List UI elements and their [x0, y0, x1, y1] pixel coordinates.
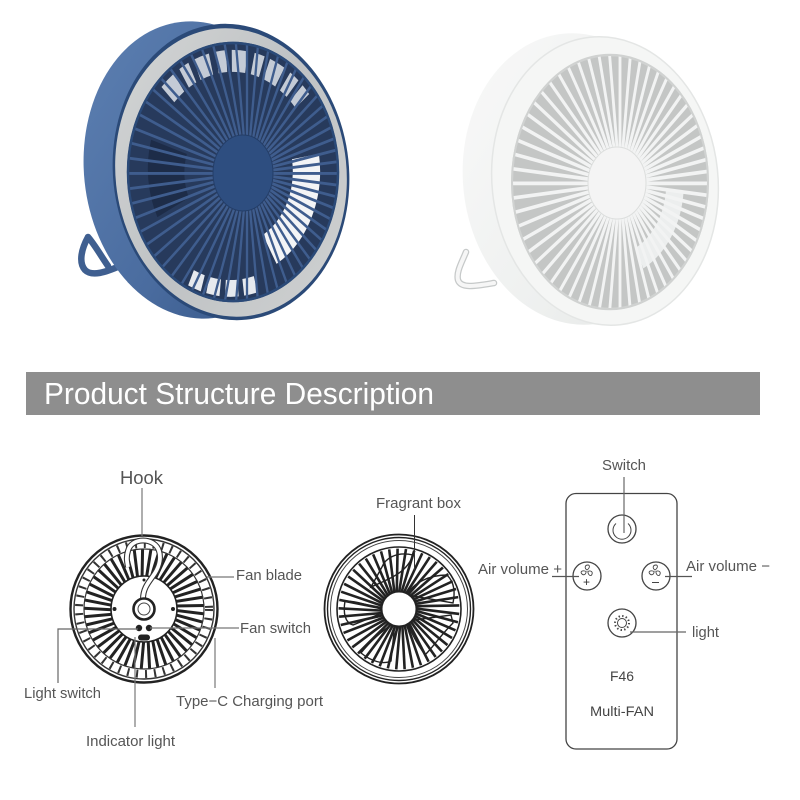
blue fan grille [126, 42, 340, 302]
light switch label [24, 629, 138, 702]
blue fan hub [213, 135, 273, 211]
white fan front rim [478, 25, 732, 337]
white fan product photo [454, 34, 719, 326]
white fan grille [511, 54, 709, 310]
white fan hub [588, 147, 646, 219]
hook label: Hook [120, 467, 164, 488]
icon: fan plus button: + [583, 575, 590, 589]
icon: light button [608, 609, 636, 637]
front grille drawing [315, 534, 474, 695]
banner title: Product Structure Description [44, 376, 434, 411]
remote body [566, 494, 677, 749]
back view diagram [24, 467, 324, 750]
light label: light [692, 624, 720, 641]
icon: blue fan hook [81, 237, 120, 273]
blue fan product photo [78, 21, 350, 320]
blue fan front rim [98, 12, 364, 332]
fan blade label [207, 567, 302, 584]
switch label: Switch [602, 457, 646, 474]
blue fan light ring [101, 17, 361, 328]
icon: fan minus button [642, 562, 670, 590]
light switch label: Light switch [24, 685, 101, 702]
indicator light label: Indicator light [86, 733, 176, 750]
fan blade label: Fan blade [236, 567, 302, 584]
type-c label: Type−C Charging port [176, 693, 324, 710]
front view diagram [315, 495, 474, 695]
blue fan body [69, 10, 325, 330]
air volume plus label: Air volume + [478, 561, 562, 578]
white fan body [448, 22, 708, 336]
light label [630, 624, 720, 641]
icon: power button [608, 477, 636, 543]
fan switch label: Fan switch [240, 620, 311, 637]
icon: white fan hook [458, 252, 494, 286]
indicator light label [86, 637, 176, 750]
product name label: Multi-FAN [590, 704, 654, 719]
section banner [26, 372, 760, 415]
hook label [120, 467, 164, 536]
model label: F46 [610, 668, 634, 684]
fragrant box label: Fragrant box [376, 495, 461, 512]
remote control diagram [478, 457, 770, 749]
fragrant box label [376, 495, 461, 570]
back grille drawing [60, 536, 218, 695]
icon: fan plus button [573, 562, 601, 590]
air volume minus label: Air volume − [686, 558, 770, 575]
